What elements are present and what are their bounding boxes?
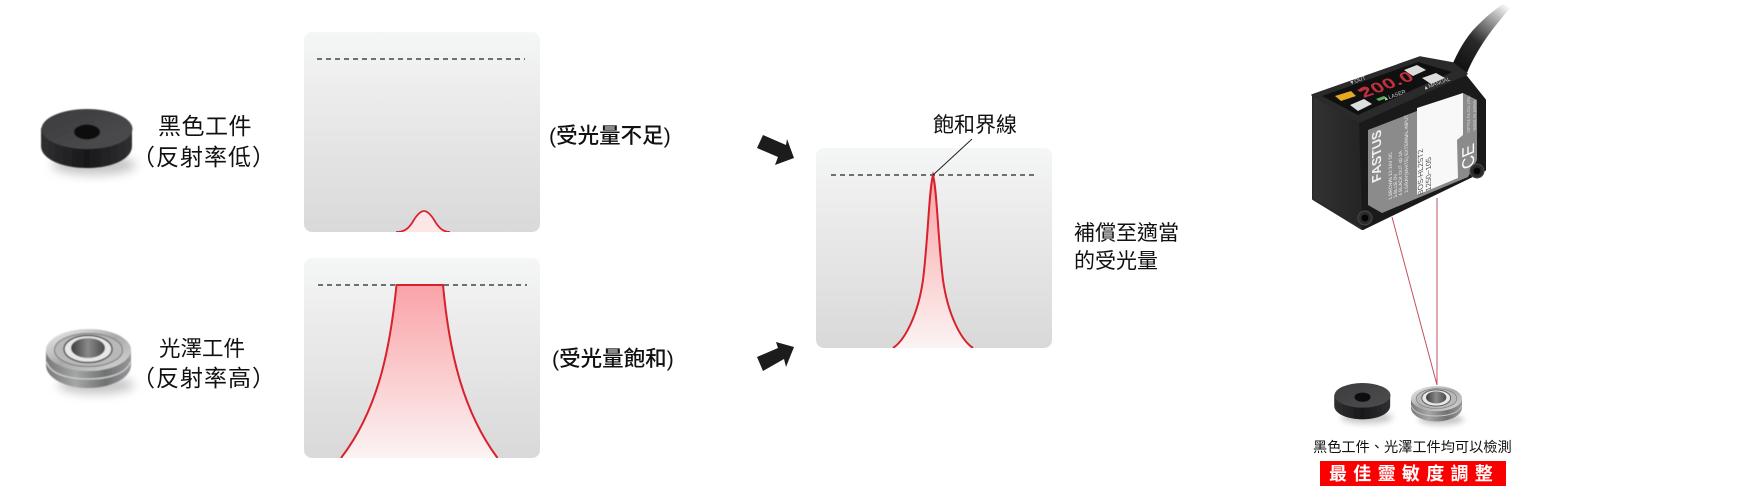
top markings: ▲MANUAL	[1423, 77, 1451, 92]
spec lines: 3.BLUE 0V	[1393, 172, 1399, 199]
cable	[1453, 4, 1510, 73]
CE mark: CE	[1459, 141, 1478, 173]
white label	[1417, 93, 1463, 195]
maker text	[1466, 95, 1477, 134]
text: saturated: (受光量飽和)	[552, 347, 674, 371]
icon: glossy workpiece	[46, 329, 134, 394]
chart: appropriate peak	[893, 175, 973, 348]
label: glossy workpiece: （反射率高）	[132, 365, 276, 391]
text: compensated: 的受光量	[1074, 250, 1158, 273]
text: insufficient: (受光量不足)	[549, 124, 671, 148]
left face	[1313, 96, 1362, 229]
laser beams	[1392, 198, 1437, 385]
label: saturation line: 飽和界線	[933, 114, 1017, 137]
icon: small black workpiece	[1334, 383, 1393, 424]
top face	[1312, 57, 1467, 122]
icon: sensor	[1312, 4, 1510, 229]
chart: small peak	[396, 211, 450, 232]
callout: best sensitivity adjustment: 最佳靈敏度調整	[1329, 464, 1499, 484]
label: black workpiece: 黑色工件	[158, 113, 252, 139]
panel: insufficient light	[304, 32, 540, 232]
top markings: ▼OUT	[1349, 75, 1367, 87]
text: compensated: 補償至適當	[1074, 222, 1179, 245]
spec lines: 4.BLACK OUT ≤0.1A	[1398, 149, 1404, 197]
top markings: ▲LASER	[1383, 89, 1407, 103]
text: compensated	[1074, 222, 1179, 273]
label: black workpiece: （反射率低）	[132, 144, 276, 170]
brand: FASTUS	[1370, 128, 1384, 185]
icon: black workpiece	[41, 109, 136, 175]
spec lines: 1.BROWN 12-24V DC	[1388, 150, 1394, 201]
display digits: 200.0	[1355, 68, 1418, 101]
maker text: OPTEX FA CO.,LTD.	[1466, 95, 1471, 134]
gray label	[1368, 93, 1477, 213]
label: glossy workpiece: 光澤工件	[159, 337, 245, 361]
label: glossy workpiece	[132, 337, 276, 391]
right face	[1360, 75, 1485, 229]
model text: 1250~105	[1424, 155, 1433, 193]
arrow: down right	[757, 135, 794, 165]
label: black workpiece	[132, 113, 276, 170]
leader line	[933, 139, 972, 175]
spec lines	[1388, 113, 1410, 201]
panel: compensated light	[816, 139, 1052, 348]
top markings	[1349, 75, 1451, 103]
icon: small glossy workpiece	[1411, 386, 1464, 425]
maker text: MADE IN JAPAN	[1472, 99, 1477, 132]
model text: BOS-HL2ST2	[1416, 147, 1425, 197]
model text	[1416, 147, 1433, 197]
buttons	[1335, 91, 1356, 101]
arrow: up right	[757, 342, 794, 371]
screws	[1358, 211, 1372, 225]
spec lines: 2.GRAY(WHITE) EXTERNAL INPUT	[1404, 113, 1410, 194]
panel: saturated light	[304, 258, 540, 458]
caption: 黑色工件、光澤工件均可以檢測	[1313, 439, 1512, 456]
chart: saturated peak	[341, 285, 498, 458]
